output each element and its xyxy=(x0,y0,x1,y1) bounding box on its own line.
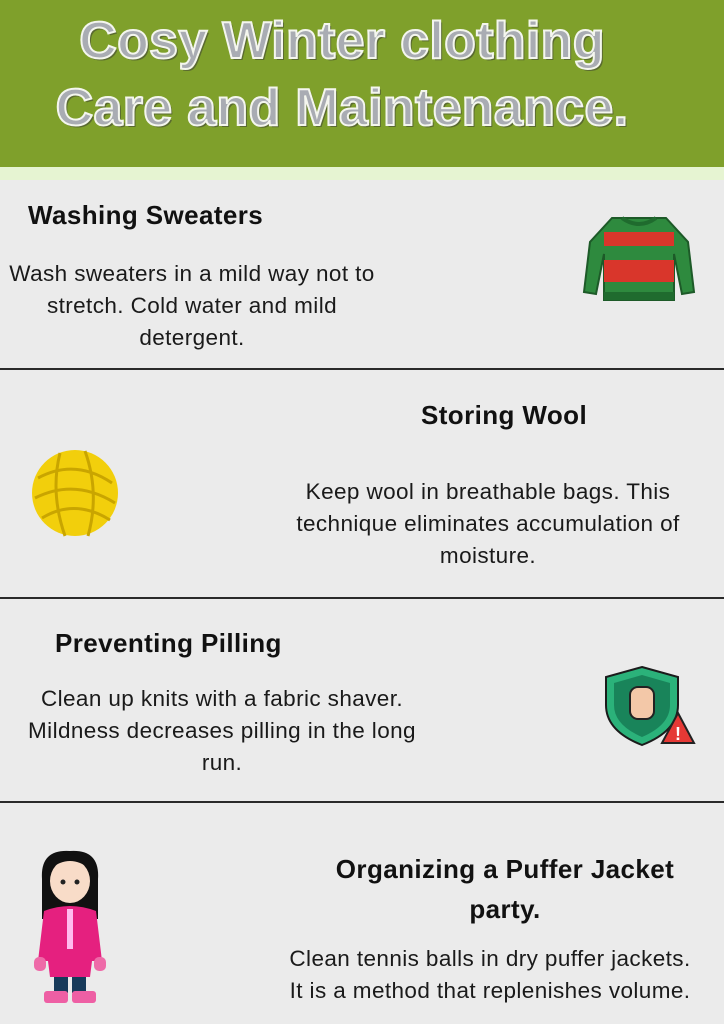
icon: shield hand warning: ! xyxy=(675,724,681,744)
title: Cosy Winter clothing xyxy=(79,12,605,70)
text block: It is a method that replenishes volume. xyxy=(290,978,690,1003)
text block xyxy=(296,479,680,568)
panel: puffer jacket xyxy=(34,850,691,1003)
heading: party. xyxy=(469,894,541,924)
text block xyxy=(9,261,375,350)
icon: girl in pink puffer xyxy=(34,850,106,1003)
heading: Organizing a Puffer Jacket xyxy=(336,854,674,884)
heading xyxy=(336,854,674,924)
text block: stretch. Cold water and mild xyxy=(47,293,337,318)
panel: preventing pilling xyxy=(28,628,696,775)
text block: technique eliminates accumulation of xyxy=(296,511,680,536)
text block: detergent. xyxy=(139,325,245,350)
title: Care and Maintenance. xyxy=(56,79,628,137)
text block: Mildness decreases pilling in the long xyxy=(28,718,416,743)
text block: Wash sweaters in a mild way not to xyxy=(9,261,375,286)
text block: Clean tennis balls in dry puffer jackets. xyxy=(289,946,691,971)
title xyxy=(56,12,628,137)
panel: storing wool xyxy=(32,400,680,568)
icon: yarn ball xyxy=(32,450,118,536)
panel: washing sweaters xyxy=(9,200,696,350)
icon: shield hand warning xyxy=(605,666,696,746)
heading: Preventing Pilling xyxy=(55,628,282,658)
heading: Washing Sweaters xyxy=(28,200,263,230)
text block: Clean up knits with a fabric shaver. xyxy=(41,686,403,711)
text block: run. xyxy=(202,750,242,775)
icon: sweater xyxy=(582,216,696,301)
heading: Storing Wool xyxy=(421,400,587,430)
text block xyxy=(289,946,691,1003)
header xyxy=(0,0,724,167)
text block xyxy=(28,686,416,775)
text block: Keep wool in breathable bags. This xyxy=(306,479,670,504)
text block: moisture. xyxy=(440,543,536,568)
